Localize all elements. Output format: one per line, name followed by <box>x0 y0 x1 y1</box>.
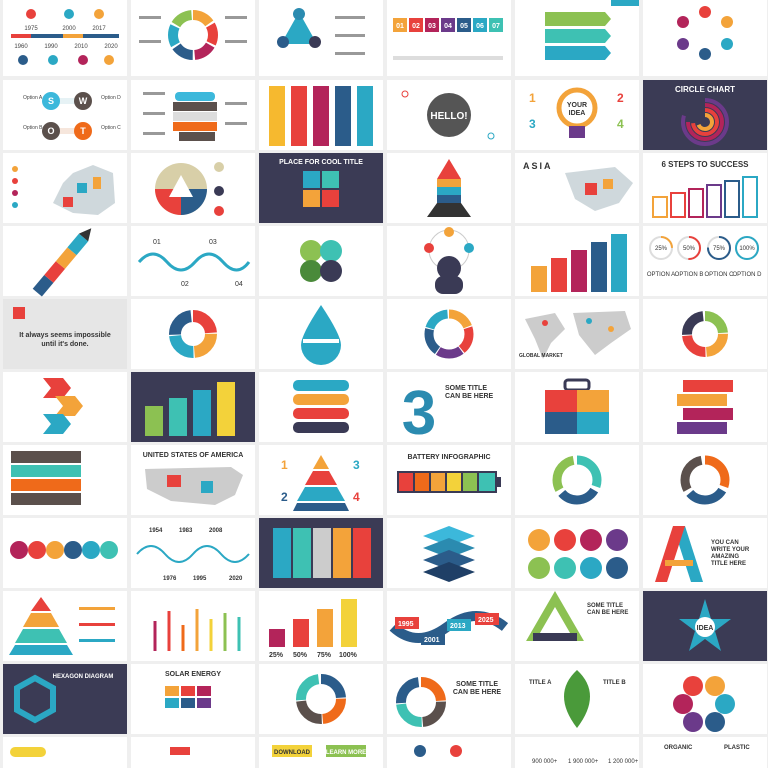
cell r1c0: SWOT: O <box>47 126 55 136</box>
cell r8c5: idea star dark <box>643 591 767 661</box>
cell r2c5: 6 steps <box>643 153 767 223</box>
cell r1c2: brush strokes <box>259 80 383 150</box>
cell r2c2: place for cool title <box>259 153 383 223</box>
cell r7c5: letter A: YOU CAN <box>711 540 739 546</box>
cell r5c1: dark arrows <box>131 372 255 442</box>
cell r3c0: pencil <box>3 224 127 296</box>
cell r8c2: 3d bars: 75% <box>317 652 332 659</box>
cell r1c3: hello <box>387 80 511 150</box>
row r10: partial cells: 900 000+ <box>532 759 558 765</box>
row r10: partial cells: ORGANIC <box>664 745 693 751</box>
cell r1c4: lightbulb: YOUR <box>567 102 587 109</box>
cell r2c0: europe map <box>3 153 127 223</box>
cell r9c2: ring <box>259 664 383 734</box>
cell r1c0: SWOT: Option C <box>101 125 121 131</box>
cell r7c5: letter A: AMAZING <box>711 554 739 560</box>
cell r4c3: ring <box>387 299 511 369</box>
cell r2c1: pie circle <box>131 153 255 223</box>
cell r9c3: semicircle title <box>387 664 511 734</box>
cell r7c5: letter A: TITLE HERE <box>711 561 746 567</box>
cell r6c2: pyramid: 4 <box>353 490 360 504</box>
cell r6c0: stacked ribbons <box>3 445 127 515</box>
cell r0c1: ring <box>131 0 255 76</box>
cell r6c3: battery: BATTERY INFOGRAPHIC <box>407 454 491 461</box>
cell r6c2: pyramid: 3 <box>353 458 360 472</box>
cell r0c0: timeline: 2000 <box>62 26 76 32</box>
cell r1c4: lightbulb <box>515 80 639 150</box>
cell r5c3: number 3 <box>387 372 511 448</box>
cell r2c4: asia <box>515 153 639 223</box>
cell r2c4: asia: ASIA <box>523 161 553 171</box>
cell r8c3: year arcs: 1995 <box>398 621 414 628</box>
cell r0c3: numbered squares: 06 <box>476 23 484 30</box>
cell r0c2: triangle <box>259 0 383 76</box>
cell r3c1: wave: 04 <box>235 281 243 288</box>
cell r5c2: pills <box>259 372 383 442</box>
cell r9c1: solar energy: SOLAR ENERGY <box>165 671 221 678</box>
cell r5c3: number 3: CAN BE HERE <box>445 393 494 400</box>
cell r1c5: circle chart dark: CIRCLE CHART <box>675 85 735 94</box>
cell r0c3: numbered squares <box>387 0 511 76</box>
cell r8c4: green triangle cycle: SOME TITLE <box>587 603 623 609</box>
cell r3c5: percent circles: OPTION A <box>647 272 675 278</box>
cell r5c3: number 3: SOME TITLE <box>445 385 487 392</box>
cell r5c0: chevrons <box>3 372 127 442</box>
cell r8c4: green triangle cycle: CAN BE HERE <box>587 610 628 616</box>
cell r6c5: circle segments <box>643 445 767 515</box>
row r10: partial cells: PLASTIC <box>724 745 750 751</box>
cell r4c5: segmented ring <box>643 299 767 369</box>
cell r8c2: 3d bars: 100% <box>339 652 358 659</box>
cell r1c0: SWOT: Option B <box>23 125 43 131</box>
cell r6c3: battery <box>387 445 511 515</box>
cell r0c5: dots circle <box>643 0 767 76</box>
cell r1c5: circle chart dark <box>643 80 767 150</box>
cell r1c1: head bands <box>131 80 255 150</box>
cell r1c3: hello: HELLO! <box>430 111 468 122</box>
cell r1c4: lightbulb: IDEA <box>569 110 585 117</box>
cell r1c0: SWOT: T <box>80 126 86 136</box>
cell r7c5: letter A <box>643 518 767 588</box>
row r10: partial cells <box>3 737 767 768</box>
cell r3c4: bar arrows <box>515 226 639 296</box>
cell r7c3: layers <box>387 518 511 588</box>
cell r3c5: percent circles: 75% <box>713 246 726 252</box>
cell r0c0: timeline: 2020 <box>104 44 118 50</box>
cell r7c5: letter A: WRITE YOUR <box>711 547 750 553</box>
cell r2c5: 6 steps: 6 STEPS TO SUCCESS <box>662 160 749 169</box>
cell r3c5: percent circles: 50% <box>683 246 696 252</box>
cell r8c3: year arcs: 2025 <box>478 617 494 624</box>
cell r9c0: hexagon diagram dark: HEXAGON DIAGRAM <box>53 674 113 680</box>
cell r3c5: percent circles: OPTION C <box>704 272 734 278</box>
cell r7c0: hexagons <box>3 518 127 588</box>
cell r1c4: lightbulb: 3 <box>529 117 536 131</box>
cell r7c1: timeline waves: 1983 <box>179 528 193 534</box>
cell r9c4: leaf: TITLE A <box>529 680 552 686</box>
cell r4c0: quote <box>3 299 127 369</box>
cell r7c1: timeline waves: 1954 <box>149 528 163 534</box>
cell r0c3: numbered squares: 05 <box>460 23 468 30</box>
cell r9c5: hex cluster <box>643 664 767 734</box>
cell r1c0: SWOT: Option A <box>23 95 43 101</box>
cell r3c5: percent circles: 100% <box>739 246 755 252</box>
cell r7c4: blobs <box>515 518 639 588</box>
cell r8c1: lollipop <box>131 591 255 661</box>
cell r6c4: cycle arrows <box>515 445 639 515</box>
cell r4c2: drop <box>259 299 383 369</box>
cell r1c0: SWOT: Option D <box>101 95 121 101</box>
cell r1c4: lightbulb: 4 <box>617 117 624 131</box>
cell r3c5: percent circles: OPTION B <box>675 272 703 278</box>
cell r0c3: numbered squares: 04 <box>444 23 452 30</box>
cell r0c3: numbered squares: 01 <box>396 23 404 30</box>
row r10: partial cells: 1 200 000+ <box>608 759 639 765</box>
cell r4c0: quote: until it's done. <box>41 341 89 348</box>
cell r3c3: head network <box>387 226 511 296</box>
cell r9c4: leaf <box>515 664 639 734</box>
cell r6c2: pyramid <box>259 445 383 515</box>
cell r1c4: lightbulb: 2 <box>617 91 624 105</box>
cell r3c5: percent circles <box>643 226 767 296</box>
cell r0c0: timeline <box>3 0 127 76</box>
cell r0c0: timeline: 1990 <box>44 44 58 50</box>
cell r4c4: world map: GLOBAL MARKET <box>519 353 563 359</box>
cell r7c1: timeline waves <box>131 518 255 588</box>
cell r0c3: numbered squares: 07 <box>492 23 500 30</box>
cell r0c0: timeline: 1960 <box>14 44 28 50</box>
cell r8c2: 3d bars: 50% <box>293 652 308 659</box>
cell r8c3: year arcs <box>387 591 511 661</box>
cell r9c0: hexagon diagram dark <box>3 664 127 734</box>
cell r1c4: lightbulb: 1 <box>529 91 536 105</box>
cell r8c5: idea star dark: IDEA <box>697 625 713 632</box>
cell r0c3: numbered squares: 03 <box>428 23 436 30</box>
cell r0c0: timeline: 1975 <box>24 26 38 32</box>
cell r6c2: pyramid: 1 <box>281 458 288 472</box>
cell r8c3: year arcs: 2001 <box>424 637 440 644</box>
cell r3c5: percent circles: 25% <box>655 246 668 252</box>
cell r5c5: ribbons <box>643 372 767 442</box>
cell r3c5: percent circles: OPTION D <box>732 272 762 278</box>
row r10: partial cells: LEARN MORE <box>326 750 366 756</box>
cell r7c1: timeline waves: 1976 <box>163 576 177 582</box>
cell r6c2: pyramid: 2 <box>281 490 288 504</box>
cell r4c0: quote: It always seems impossible <box>19 332 111 339</box>
cell r3c1: wave <box>131 226 255 296</box>
cell r1c0: SWOT: S <box>48 96 54 106</box>
cell r7c2: dark columns <box>259 518 383 588</box>
cell r1c0: SWOT: W <box>79 96 88 106</box>
cell r0c0: timeline: 2017 <box>92 26 106 32</box>
cell r1c0: SWOT <box>3 80 127 150</box>
cell r9c3: semicircle title: CAN BE HERE <box>453 689 501 696</box>
cell r9c1: solar energy <box>131 664 255 734</box>
cell r2c2: place for cool title: PLACE FOR COOL TITLE <box>279 159 363 166</box>
cell r8c0: pyramid 3d <box>3 591 127 661</box>
cell r3c1: wave: 01 <box>153 239 161 246</box>
cell r4c1: segmented circle <box>131 299 255 369</box>
cell r3c1: wave: 02 <box>181 281 189 288</box>
row r10: partial cells: DOWNLOAD <box>274 750 311 756</box>
cell r7c1: timeline waves: 2020 <box>229 576 243 582</box>
row r10: partial cells: 1 900 000+ <box>568 759 599 765</box>
cell r9c3: semicircle title: SOME TITLE <box>456 681 498 688</box>
cell r3c2: clover <box>259 226 383 296</box>
cell r8c4: green triangle cycle <box>515 591 639 661</box>
cell r0c4: arrows stack <box>515 0 639 76</box>
cell r5c3: number 3: 3 <box>402 379 436 448</box>
cell r3c1: wave: 03 <box>209 239 217 246</box>
cell r6c1: usa <box>131 445 255 515</box>
cell r8c2: 3d bars: 25% <box>269 652 284 659</box>
cell r7c1: timeline waves: 2008 <box>209 528 223 534</box>
cell r7c1: timeline waves: 1995 <box>193 576 207 582</box>
cell r8c2: 3d bars <box>259 591 383 661</box>
cell r0c3: numbered squares: 02 <box>412 23 420 30</box>
cell r5c4: briefcase <box>515 372 639 442</box>
cell r2c3: rocket <box>387 153 511 223</box>
cell r8c3: year arcs: 2013 <box>450 623 466 630</box>
cell r6c1: usa: UNITED STATES OF AMERICA <box>143 452 243 459</box>
cell r0c0: timeline: 2010 <box>74 44 88 50</box>
cell r4c4: world map <box>515 299 639 369</box>
cell r9c4: leaf: TITLE B <box>603 680 626 686</box>
